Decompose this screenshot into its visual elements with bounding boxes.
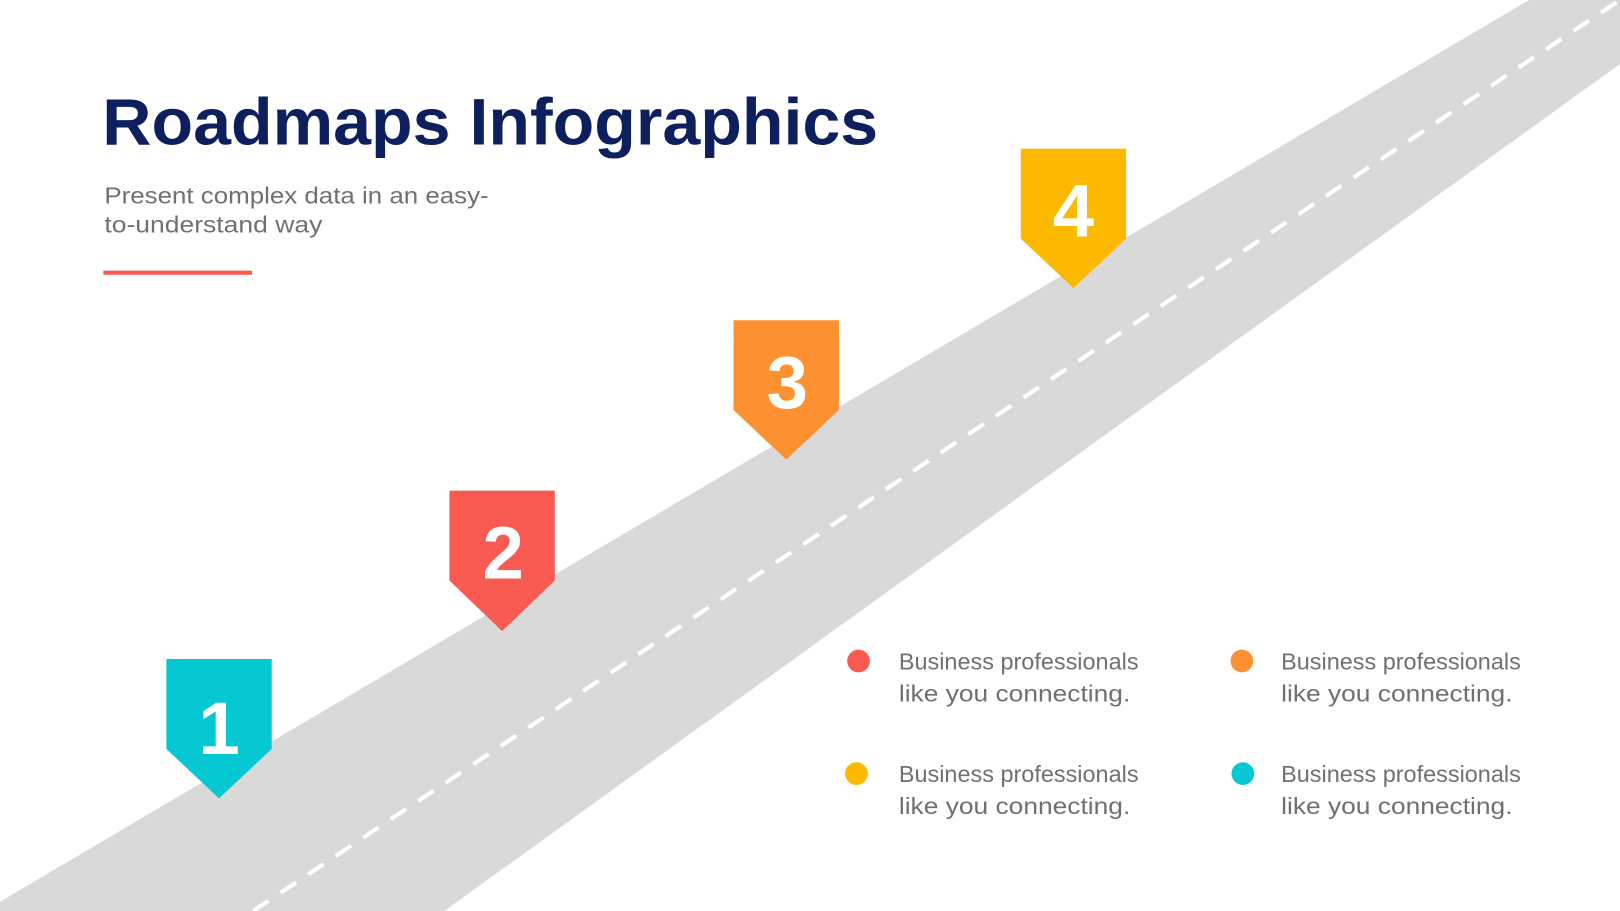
- legend item yellow: Business professionals: [899, 761, 1139, 787]
- marker 2: [449, 491, 555, 631]
- title: Roadmaps Infographics: [102, 86, 878, 160]
- legend item orange: like you connecting.: [1281, 680, 1513, 706]
- subtitle: Present complex data in an easy-: [104, 182, 489, 208]
- marker 4: [1021, 149, 1126, 288]
- legend item red: [847, 648, 1139, 706]
- marker 2: 2: [482, 511, 524, 594]
- legend item orange: Business professionals: [1281, 648, 1521, 674]
- legend item yellow: like you connecting.: [899, 793, 1130, 819]
- legend item red: Business professionals: [899, 648, 1139, 674]
- legend item teal: Business professionals: [1281, 761, 1521, 787]
- subtitle: to-understand way: [104, 211, 323, 237]
- legend item red: like you connecting.: [899, 680, 1130, 706]
- marker 1: 1: [198, 687, 240, 770]
- legend item teal: [1232, 761, 1521, 819]
- marker 3: [734, 320, 839, 460]
- accent line: [103, 271, 252, 275]
- marker 1: [166, 659, 272, 798]
- legend item teal: like you connecting.: [1281, 793, 1513, 819]
- marker 4: 4: [1053, 170, 1094, 253]
- legend item yellow: [845, 761, 1139, 819]
- legend item orange: [1230, 648, 1521, 706]
- marker 3: 3: [767, 341, 808, 424]
